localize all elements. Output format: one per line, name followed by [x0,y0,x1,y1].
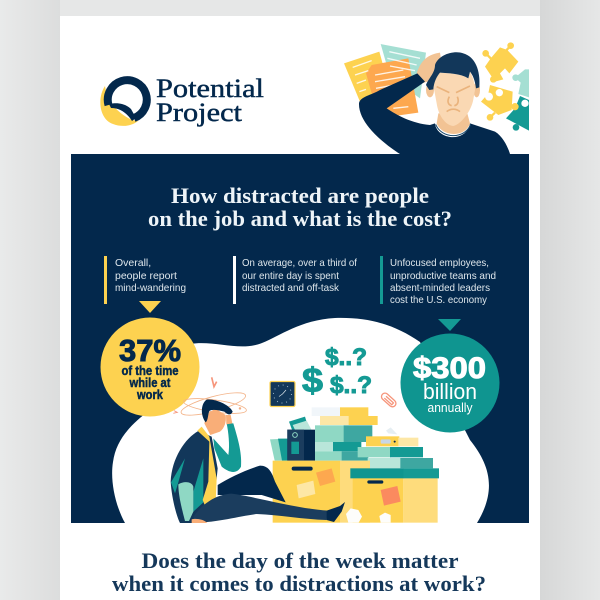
icon: mint paper [381,44,426,98]
heading: day of the week: Does the day of the week matter [142,548,459,573]
text block: cost to economy: absent-minded leaders [390,282,490,294]
sub-element: teal arm [213,423,241,472]
icon: paperclip [380,392,397,408]
logo: Potential Project: Potential [156,74,264,103]
logo: Potential Project [100,74,264,127]
sub-element: tie [197,427,217,507]
sub-element: head [204,408,226,435]
sub-element: front box [350,468,439,523]
heading: day of the week [112,548,486,596]
text block: third of day: distracted and off-task [242,282,340,294]
icon: dollar signs and question marks: $ [302,362,323,400]
text block: mind-wandering [104,256,186,304]
text block: third of day: On average, over a third of [242,257,357,269]
heading: day of the week: when it comes to distractions at work? [112,571,486,596]
illustration: stacks of paper in boxes [270,407,439,523]
icon: dollar signs and question marks [302,344,372,400]
white cloud backdrop [112,318,489,523]
text block: mind-wandering: Overall, [115,257,151,269]
sub-element: mint sleeve [178,482,193,521]
callout: $300 billion teal circle: billion [423,379,477,404]
logo: Potential Project: Project [156,98,243,127]
sub-element: paper balls [346,508,391,523]
text block: cost to economy [380,256,496,306]
sub-element: front leg and shoe [193,494,328,523]
figure: man [359,42,529,154]
text block: third of day: our entire day is spent [242,270,339,282]
icon: orange paper [366,58,418,117]
sub-element: lightning spark [212,377,217,387]
callout: 37% yellow circle: 37% [119,333,181,368]
text block: mind-wandering: people report [115,270,177,282]
heading: how distracted: on the job and what is the cost? [148,206,452,231]
callout: 37% yellow circle: while at [129,376,171,390]
text block: cost to economy: Unfocused employees, [390,257,489,269]
panel: white page card [60,16,540,600]
text block: cost to economy: unproductive teams and [390,270,496,282]
callout: $300 billion teal circle: $300 [413,352,486,385]
heading: how distracted [148,183,452,231]
text block: third of day [233,256,357,304]
text block: cost to economy: cost the U.S. economy [390,294,488,306]
callout: $300 billion teal circle [400,319,500,432]
sub-element: left box [273,461,370,523]
text block: mind-wandering: mind-wandering [115,282,186,294]
icon: dollar signs and question marks: $..? [330,372,372,399]
sub-element: dizzy swirls [173,388,247,420]
icon: wall clock [270,382,295,406]
sub-element: paper stacks [270,407,433,468]
icon: dollar signs and question marks: $..? [325,344,367,371]
callout: 37% yellow circle: of the time [122,364,179,378]
sub-element: jacket [171,431,218,523]
sub-element: back leg [218,466,286,502]
callout: 37% yellow circle [100,301,200,416]
illustration: frustrated man with papers and puzzle pieces [344,42,529,154]
panel: navy main section [71,154,529,523]
callout: 37% yellow circle: work [136,388,163,402]
icon: yellow paper [344,52,390,103]
heading: how distracted: How distracted are people [171,183,429,208]
illustration: overwhelmed seated man [171,377,345,523]
icon: puzzle pieces [481,42,529,131]
callout: $300 billion teal circle: annually [428,401,473,415]
